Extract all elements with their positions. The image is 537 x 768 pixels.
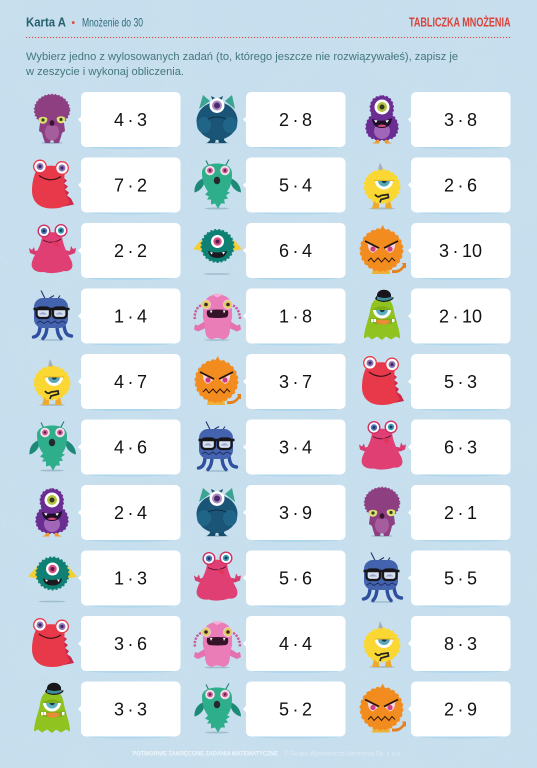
task card: 2 · 8 xyxy=(243,92,346,149)
row 5 xyxy=(34,354,510,411)
task card: 8 · 3 xyxy=(408,616,510,673)
footer credits xyxy=(132,750,402,758)
task card: 6 · 3 xyxy=(408,420,510,476)
task card: 2 · 10 xyxy=(408,288,510,346)
task card: 3 · 4: 3 · 4 xyxy=(279,438,312,458)
monster: red xyxy=(32,160,74,208)
task card: 3 · 9 xyxy=(243,485,346,542)
task card: 5 · 4: 5 · 4 xyxy=(279,176,312,196)
task card: 4 · 6: 4 · 6 xyxy=(114,438,147,458)
task card: 2 · 9 xyxy=(408,682,510,738)
task card: 5 · 6 xyxy=(243,550,346,608)
task card: 4 · 7: 4 · 7 xyxy=(114,372,147,392)
task card: 2 · 2: 2 · 2 xyxy=(114,241,147,261)
task card: 4 · 4: 4 · 4 xyxy=(279,634,312,654)
monster: pink blob xyxy=(359,421,406,470)
row 9 xyxy=(32,616,510,673)
task card: 5 · 3: 5 · 3 xyxy=(444,372,477,392)
task card: 3 · 10 xyxy=(408,223,510,280)
monster: navy cyclops xyxy=(196,95,238,144)
footer credits: © Grupa Wydawnicza Harmonia Sp. z o.o. xyxy=(284,750,402,758)
monster: pink xyxy=(194,621,241,668)
task card: 4 · 7 xyxy=(78,354,180,411)
monster: orange xyxy=(360,225,406,274)
monster: yellow xyxy=(364,621,400,668)
task card: 5 · 2: 5 · 2 xyxy=(279,700,312,720)
monster: pink blob xyxy=(194,552,241,601)
row 10 xyxy=(34,682,510,738)
monster: blue with glasses xyxy=(34,290,72,341)
task card: 1 · 3: 1 · 3 xyxy=(114,568,147,588)
task card: 3 · 8: 3 · 8 xyxy=(444,110,477,130)
task card: 2 · 1 xyxy=(408,485,510,542)
task card: 6 · 4: 6 · 4 xyxy=(279,241,312,261)
task card: 6 · 3: 6 · 3 xyxy=(444,438,477,458)
task card: 4 · 6 xyxy=(78,420,180,476)
monster: yellow xyxy=(34,359,70,406)
task card: 3 · 7: 3 · 7 xyxy=(279,372,312,392)
monster: purple fuzzy xyxy=(364,488,400,537)
header: card title: Karta A xyxy=(26,16,66,30)
monster: violet cyclops xyxy=(36,489,68,536)
monster: orange xyxy=(196,356,241,405)
monster: teal xyxy=(193,230,242,275)
task card: 2 · 10: 2 · 10 xyxy=(439,306,482,326)
monster: blue with glasses xyxy=(364,552,402,603)
task card: 2 · 4 xyxy=(78,485,180,542)
monster: pink blob xyxy=(29,225,76,273)
header: card title: Mnożenie do 30 xyxy=(82,16,143,30)
row 7 xyxy=(36,485,510,542)
monster: violet cyclops xyxy=(366,96,398,144)
monster: navy cyclops xyxy=(196,488,238,537)
task card: 1 · 8 xyxy=(243,288,346,346)
task card: 2 · 2 xyxy=(78,223,180,280)
task card: 7 · 2: 7 · 2 xyxy=(114,176,147,196)
task card: 6 · 4 xyxy=(243,223,346,280)
task card: 3 · 3: 3 · 3 xyxy=(114,700,147,720)
monster: orange xyxy=(360,684,406,732)
header: card title xyxy=(26,16,143,30)
monster: teal xyxy=(28,558,77,602)
instruction text: w zeszycie i wykonaj obliczenia. xyxy=(25,66,184,78)
task card: 1 · 3 xyxy=(78,550,180,608)
monster: lime with hat xyxy=(364,290,400,340)
header: card title: • xyxy=(72,18,76,29)
monster: purple fuzzy xyxy=(34,94,70,144)
task card: 2 · 4: 2 · 4 xyxy=(114,503,147,523)
task card: 8 · 3: 8 · 3 xyxy=(444,634,477,654)
task card: 5 · 5 xyxy=(408,550,510,608)
row 4 xyxy=(34,288,510,346)
task card: 5 · 2 xyxy=(243,682,346,738)
row 6 xyxy=(29,420,510,476)
task card: 4 · 4 xyxy=(243,616,346,673)
monster: blue with glasses xyxy=(198,422,236,472)
task card: 3 · 8 xyxy=(408,92,510,149)
task card: 5 · 6: 5 · 6 xyxy=(279,568,312,588)
task card: 4 · 3: 4 · 3 xyxy=(114,110,147,130)
row 8 xyxy=(28,550,510,608)
task card: 2 · 1: 2 · 1 xyxy=(444,503,477,523)
task card: 3 · 10: 3 · 10 xyxy=(439,241,482,261)
task card: 2 · 6 xyxy=(408,158,510,214)
task card: 3 · 3 xyxy=(78,682,180,738)
task card: 5 · 5: 5 · 5 xyxy=(444,568,477,588)
task card: 1 · 4 xyxy=(78,288,180,346)
task card: 3 · 6: 3 · 6 xyxy=(114,634,147,654)
task card: 2 · 6: 2 · 6 xyxy=(444,176,477,196)
row 3 xyxy=(29,223,510,280)
footer credits: POTWORNIE ZAKRĘCONE ZADANIA MATEMATYCZNE xyxy=(132,750,279,758)
task card: 3 · 4 xyxy=(243,420,346,476)
monster: yellow xyxy=(364,162,400,210)
task card: 1 · 4: 1 · 4 xyxy=(114,306,147,326)
monster: green xyxy=(194,160,241,210)
instruction text xyxy=(25,51,458,78)
instruction text: Wybierz jedno z wylosowanych zadań (to, którego jeszcze nie rozwiązywałeś), zapisz je xyxy=(26,51,458,63)
task card: 3 · 6 xyxy=(78,616,180,673)
task card: 4 · 3 xyxy=(78,92,180,149)
task card: 3 · 9: 3 · 9 xyxy=(279,503,312,523)
monster: pink xyxy=(194,294,241,341)
monster: lime with hat xyxy=(34,683,70,733)
task card: 5 · 3 xyxy=(408,354,510,411)
row 2 xyxy=(32,158,510,214)
monster: red xyxy=(32,619,74,667)
monster: green xyxy=(194,684,241,734)
task card: 2 · 9: 2 · 9 xyxy=(444,700,477,720)
monster: green xyxy=(29,422,76,472)
task card: 5 · 4 xyxy=(243,158,346,214)
task card: 1 · 8: 1 · 8 xyxy=(279,306,312,326)
task card: 2 · 8: 2 · 8 xyxy=(279,110,312,130)
monster: red xyxy=(362,357,404,405)
task card: 3 · 7 xyxy=(243,354,346,411)
task card: 7 · 2 xyxy=(78,158,180,214)
row 1 xyxy=(34,92,510,149)
